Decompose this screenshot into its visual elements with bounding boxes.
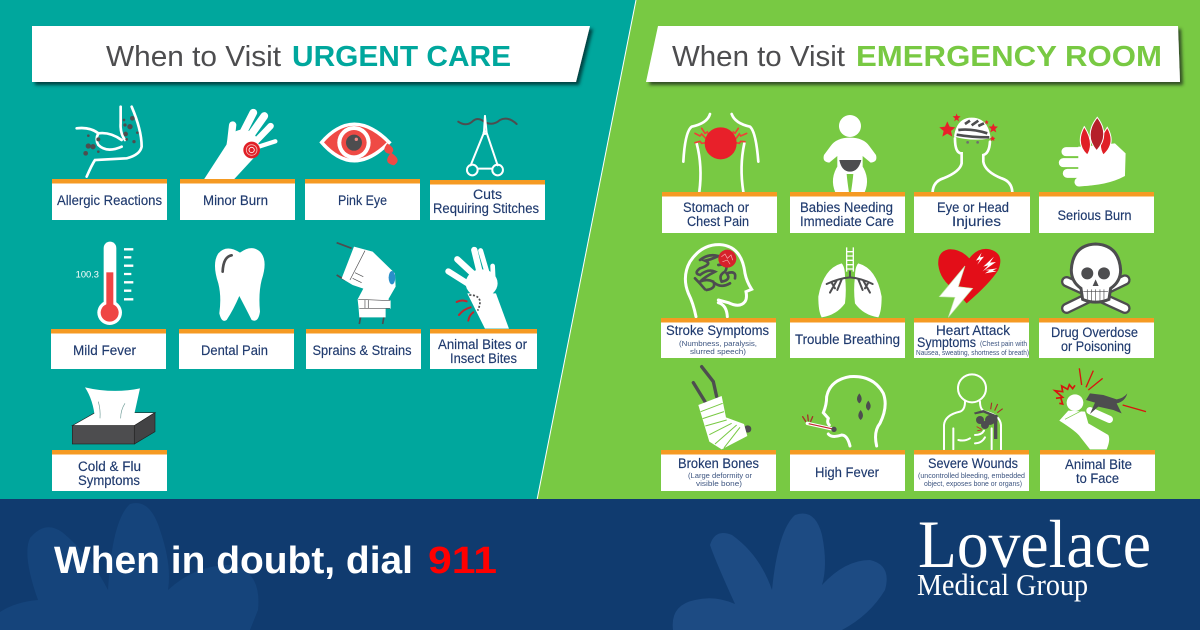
- label: stroke symptoms: [661, 318, 776, 358]
- label: dental pain: Dental Pain: [201, 343, 268, 358]
- item: sprains and strains: [306, 243, 421, 369]
- label: eye or head injuries: Eye or Head: [937, 200, 1009, 215]
- label: stroke symptoms: (Numbness, paralysis,: [679, 339, 757, 348]
- item: cold and flu symptoms: [52, 387, 167, 491]
- label: animal bites or insect bites: Insect Bites: [450, 351, 517, 366]
- label: animal bite to face: to Face: [1076, 471, 1119, 486]
- item: high fever: [790, 377, 905, 491]
- decoration: right footer flower: [673, 514, 887, 630]
- label: pink eye: Pink Eye: [338, 193, 387, 208]
- heading: urgent care: [32, 26, 590, 82]
- item: allergic reactions: [52, 107, 167, 220]
- label: animal bites or insect bites: [430, 329, 537, 369]
- background: emergency room green side: [537, 0, 1200, 500]
- label: allergic reactions: Allergic Reactions: [57, 193, 162, 208]
- icon: bandaged head with stars: [933, 113, 1012, 192]
- label: broken bones: (Large deformity or: [688, 471, 753, 480]
- label: cuts requiring stitches: Requiring Stitches: [433, 201, 539, 216]
- icon: head with brain: [685, 245, 752, 317]
- icon: forceps and thread: [458, 116, 517, 175]
- label: animal bite to face: [1040, 450, 1155, 491]
- item: serious burn: [1039, 117, 1154, 233]
- item: heart attack symptoms: [914, 249, 1029, 358]
- item: dental pain: [179, 248, 294, 369]
- icon: baby in diaper: [824, 115, 876, 192]
- item: animal bites or insect bites: [430, 250, 537, 369]
- item: minor burn: [180, 113, 295, 220]
- label: minor burn: Minor Burn: [203, 193, 268, 208]
- label: heart attack symptoms: [914, 318, 1029, 358]
- logo: lovelace medical group: Lovelace: [918, 506, 1151, 582]
- label: eye or head injuries: [914, 192, 1030, 233]
- label: heart attack symptoms: Symptoms: [917, 335, 976, 350]
- label: trouble breathing: Trouble Breathing: [795, 332, 900, 347]
- label: cold and flu symptoms: [52, 450, 167, 491]
- item: broken bones: [661, 367, 776, 491]
- label: heart attack symptoms: Heart Attack: [936, 323, 1010, 338]
- heading: urgent care: URGENT CARE: [292, 41, 511, 73]
- label: serious burn: Serious Burn: [1058, 208, 1132, 223]
- label: broken bones: Broken Bones: [678, 456, 759, 471]
- label: stomach or chest pain: Chest Pain: [687, 214, 749, 229]
- label: heart attack symptoms: (Chest pain with: [980, 339, 1027, 348]
- icon: leg in cast: [693, 367, 751, 449]
- label: mild fever: Mild Fever: [73, 343, 136, 358]
- label: babies needing immediate care: Babies Needing: [800, 200, 893, 215]
- decoration: left footer flower: [0, 503, 258, 630]
- icon: thermometer: 100.3: [76, 270, 99, 280]
- icon: burning hand: [1063, 117, 1126, 186]
- label: severe wounds: (uncontrolled bleeding, embedded: [918, 471, 1025, 480]
- icon: head with thermometer: [803, 377, 885, 446]
- icon: tissue box: [72, 387, 155, 444]
- icon: person bitten by animal: [1055, 368, 1146, 449]
- label: cold and flu symptoms: Symptoms: [78, 473, 140, 488]
- label: cold and flu symptoms: Cold & Flu: [78, 459, 141, 474]
- logo: lovelace medical group: Medical Group: [917, 567, 1088, 602]
- item: babies needing immediate care: [790, 115, 905, 233]
- label: broken bones: visible bone): [696, 479, 743, 488]
- icon: torso with wound: [944, 374, 1003, 449]
- item: trouble breathing: [790, 247, 905, 358]
- label: severe wounds: object, exposes bone or organs): [924, 479, 1022, 488]
- item: cuts requiring stitches: [430, 116, 545, 220]
- heading: urgent care: When to Visit: [106, 41, 281, 73]
- label: sprains and strains: Sprains & Strains: [312, 343, 412, 358]
- callout: when in doubt dial 911: 911: [428, 540, 497, 582]
- icon: lungs: [818, 247, 882, 317]
- item: mild fever: [51, 242, 166, 369]
- label: babies needing immediate care: [790, 192, 905, 233]
- item: severe wounds: [914, 374, 1029, 491]
- label: eye or head injuries: Injuries: [952, 214, 1001, 229]
- icon: hand with burn target: [204, 113, 275, 179]
- label: drug overdose or poisoning: or Poisoning: [1061, 339, 1131, 354]
- label: stomach or chest pain: [662, 192, 777, 233]
- label: babies needing immediate care: Immediate Care: [800, 214, 894, 229]
- icon: heart with lightning bolt: [938, 249, 1000, 317]
- icon: knee brace: [337, 243, 396, 324]
- label: cuts requiring stitches: [430, 180, 545, 220]
- icon: bitten hand: [448, 250, 509, 329]
- label: animal bites or insect bites: Animal Bites or: [438, 337, 527, 352]
- icon: red eye: [319, 122, 398, 165]
- icon: allergic arm: [77, 107, 142, 177]
- label: severe wounds: Severe Wounds: [928, 456, 1018, 471]
- item: animal bite to face: [1040, 368, 1155, 491]
- label: stomach or chest pain: Stomach or: [683, 200, 749, 215]
- icon: tooth: [215, 248, 265, 321]
- icon: skull and crossbones: [1067, 244, 1125, 308]
- heading: emergency room: When to Visit: [672, 41, 845, 73]
- footer band: [0, 499, 1200, 630]
- label: drug overdose or poisoning: Drug Overdose: [1051, 325, 1138, 340]
- label: stroke symptoms: Stroke Symptoms: [666, 323, 769, 338]
- item: stroke symptoms: [661, 245, 776, 358]
- heading: emergency room: [646, 26, 1180, 82]
- panel: urgent care: [32, 26, 590, 491]
- callout: when in doubt dial 911: When in doubt, dial: [54, 540, 413, 582]
- icon: chest with red pain circle: [683, 114, 758, 192]
- label: high fever: High Fever: [815, 465, 879, 480]
- item: pink eye: [305, 122, 420, 220]
- label: severe wounds: [914, 450, 1029, 491]
- item: eye or head injuries: [914, 113, 1030, 233]
- item: stomach or chest pain: [662, 114, 777, 233]
- panel: emergency room: [646, 26, 1180, 491]
- heading: emergency room: EMERGENCY ROOM: [856, 41, 1162, 73]
- label: heart attack symptoms: Nausea, sweating, shortness of breath): [916, 348, 1029, 357]
- background: urgent care teal side: [0, 0, 1200, 500]
- label: broken bones: [661, 450, 776, 491]
- label: cuts requiring stitches: Cuts: [473, 187, 502, 202]
- item: drug overdose or poisoning: [1039, 244, 1154, 358]
- label: drug overdose or poisoning: [1039, 318, 1154, 358]
- label: stroke symptoms: slurred speech): [690, 347, 747, 356]
- label: animal bite to face: Animal Bite: [1065, 457, 1132, 472]
